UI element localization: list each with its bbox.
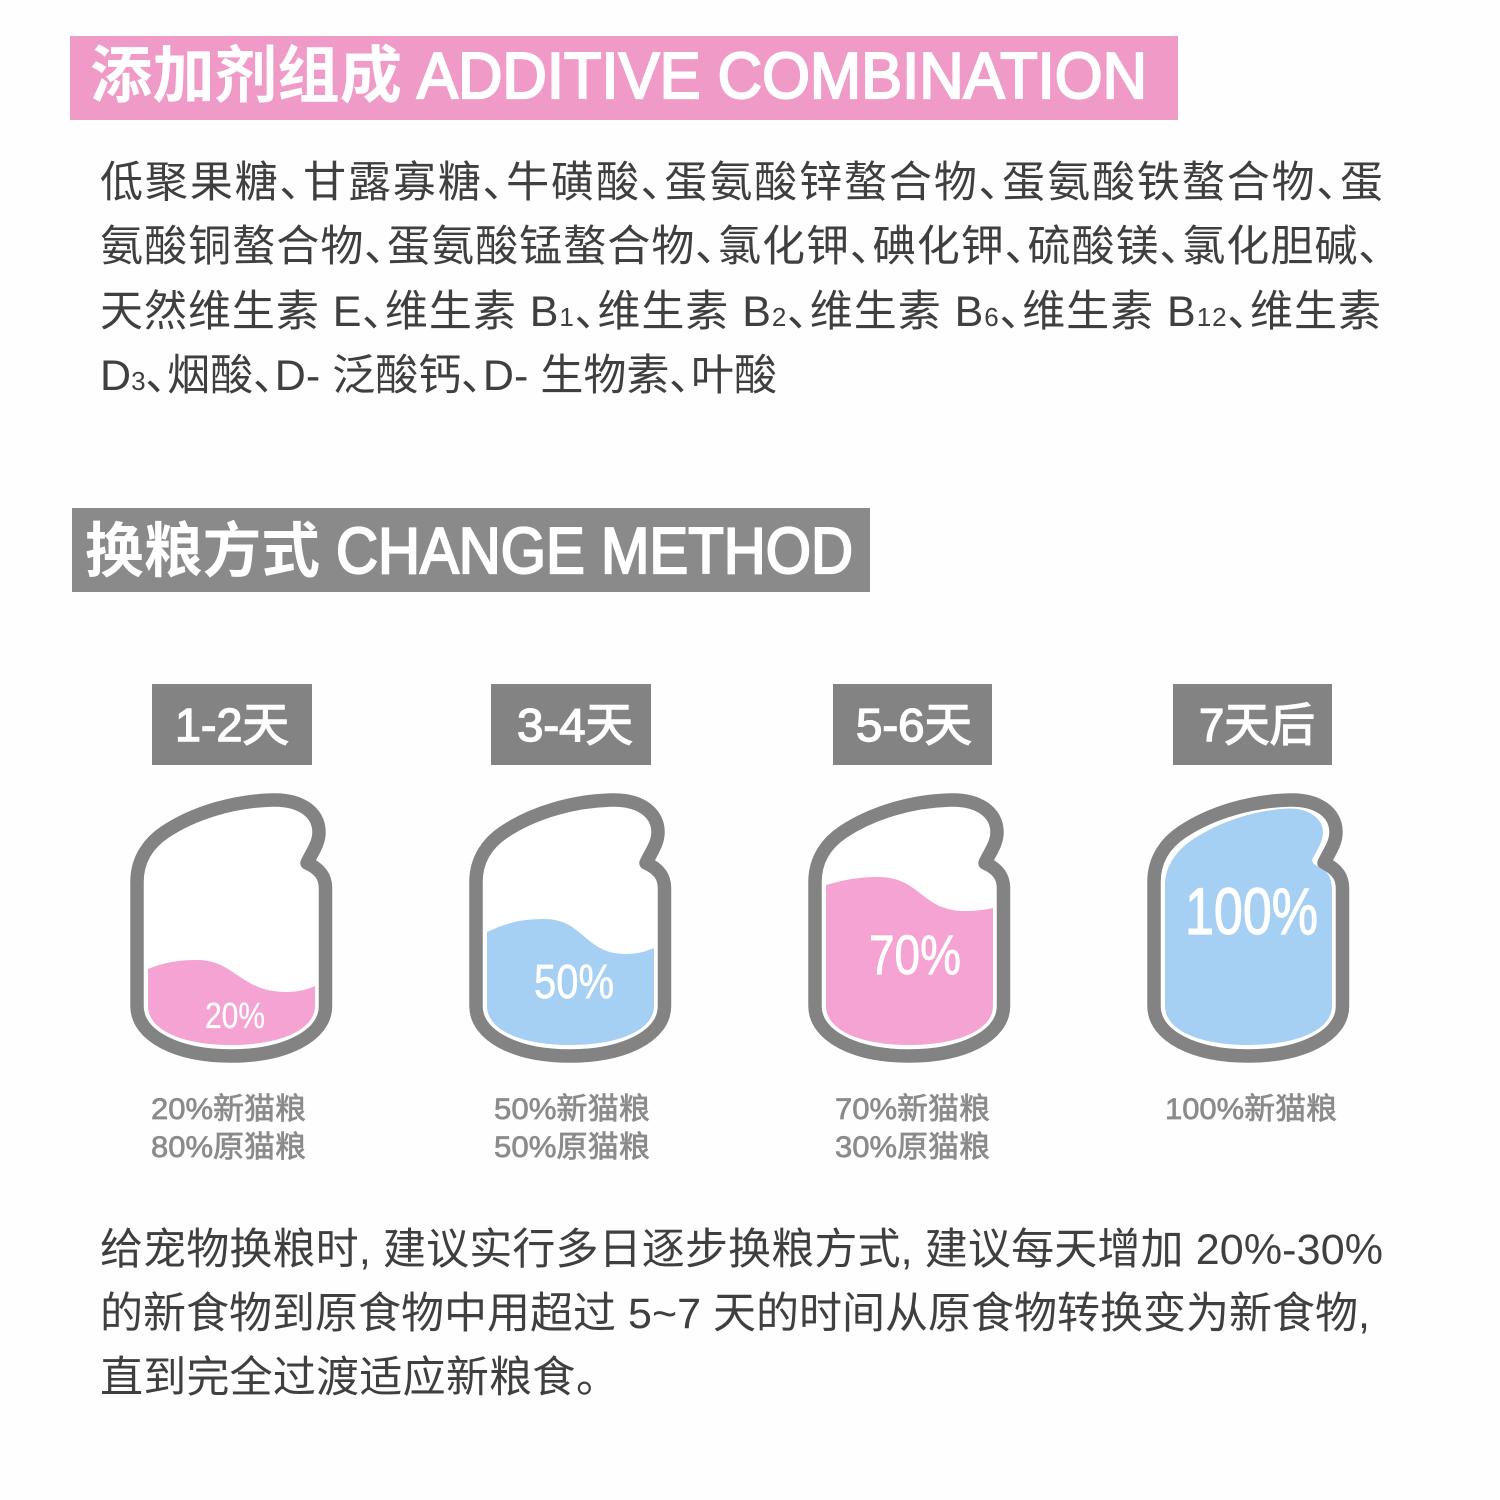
caption: 100% mix: 100%新猫粮 [1165, 1093, 1337, 1126]
icon: food bag 50%: 50% [534, 956, 614, 1009]
text block: additive list: 天然维生素 E、维生素 B1、维生素 B2、维生素 B6、维生素 B12、维生素 [100, 288, 1381, 336]
text block: additive list: 低聚果糖、甘露寡糖、牛磺酸、蛋氨酸锌螯合物、蛋氨酸铁螯合物、蛋 [100, 159, 1383, 207]
text block: additive list [100, 159, 1383, 400]
day tag: 5-6 days: 5-6天 [856, 699, 972, 751]
caption: 50% mix: 50%原猫粮 [494, 1131, 650, 1164]
caption: 20% mix: 20%新猫粮 [151, 1093, 306, 1126]
heading: additive combination [70, 36, 1178, 120]
text block: additive list: D3、烟酸、D- 泛酸钙、D- 生物素、叶酸 [100, 352, 777, 400]
icon: food bag 20% [137, 800, 326, 1056]
day tag: after 7 days: 7天后 [1199, 699, 1315, 751]
text block: feeding advice: 的新食物到原食物中用超过 5~7 天的时间从原食物转换变为新食物, [100, 1290, 1370, 1338]
day tag: 5-6 days [833, 684, 992, 765]
caption: 50% mix [494, 1093, 650, 1164]
caption: 20% mix: 80%原猫粮 [151, 1131, 306, 1164]
caption: 20% mix [151, 1093, 306, 1164]
icon: food bag 50% [476, 800, 664, 1056]
icon: food bag 100%: 100% [1185, 874, 1318, 948]
heading: additive combination: 添加剂组成 [90, 42, 402, 111]
caption: 70% mix [835, 1093, 990, 1164]
icon: food bag 70% [815, 800, 1004, 1056]
text block: feeding advice: 直到完全过渡适应新粮食。 [100, 1354, 597, 1402]
day tag: 3-4 days: 3-4天 [517, 699, 633, 751]
heading: change method: 换粮方式 [85, 518, 320, 585]
day tag: 1-2 days: 1-2天 [175, 699, 289, 751]
icon: food bag 20%: 20% [205, 995, 265, 1036]
heading: change method [72, 508, 870, 592]
day tag: 3-4 days [491, 684, 651, 765]
text block: feeding advice [100, 1226, 1383, 1402]
caption: 70% mix: 30%原猫粮 [835, 1131, 990, 1164]
caption: 50% mix: 50%新猫粮 [494, 1093, 650, 1126]
day tag: after 7 days [1173, 684, 1332, 765]
text block: additive list: 氨酸铜螯合物、蛋氨酸锰螯合物、氯化钾、碘化钾、硫酸镁、氯化胆碱、 [100, 223, 1380, 271]
day tag: 1-2 days [152, 684, 312, 765]
caption: 70% mix: 70%新猫粮 [835, 1093, 990, 1126]
icon: food bag 100% [1154, 800, 1342, 1056]
icon: food bag 70%: 70% [869, 923, 961, 986]
text block: feeding advice: 给宠物换粮时, 建议实行多日逐步换粮方式, 建议每天增加 20%-30% [100, 1226, 1383, 1274]
heading: change method: CHANGE METHOD [336, 514, 853, 587]
heading: additive combination: ADDITIVE COMBINATION [417, 39, 1147, 112]
